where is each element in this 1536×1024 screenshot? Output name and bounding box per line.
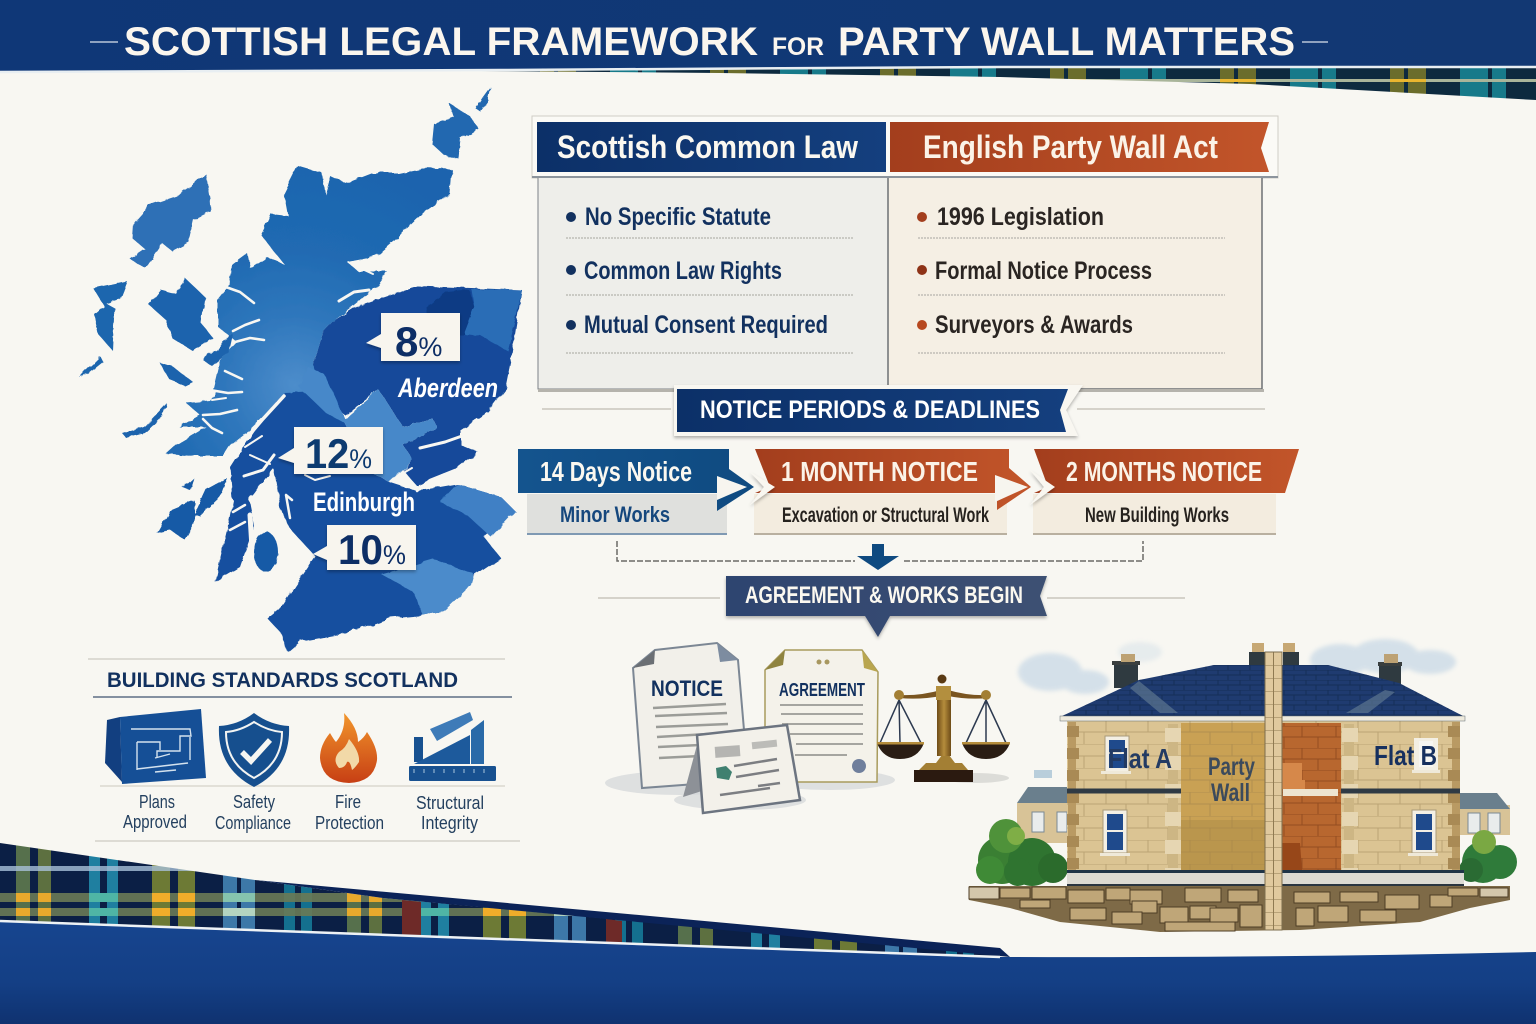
illustration: ground and stone foundation (969, 886, 1510, 932)
label: Aberdeen: Aberdeen (397, 373, 498, 403)
step: 2 months notice: 2 MONTHS NOTICE (1066, 456, 1262, 487)
label: safety compliance: Safety (233, 792, 275, 812)
header band (0, 0, 1536, 100)
icon: signed card (674, 725, 806, 813)
title: PARTY WALL MATTERS (838, 20, 1295, 64)
icon: structural tools (409, 712, 496, 781)
label: structural integrity: Integrity (421, 813, 478, 833)
header: English Party Wall Act: English Party Wall Act (923, 129, 1218, 165)
sea lochs (203, 268, 462, 548)
floor lines (1067, 788, 1460, 794)
arrow: first chevron (750, 472, 775, 505)
header: English Party Wall Act (890, 122, 1269, 172)
windows (1100, 736, 1440, 856)
step: 14 days notice: Minor Works (560, 502, 670, 527)
title: FOR (772, 33, 824, 61)
banner: agreement and works begin: AGREEMENT & WORKS BEGIN (745, 582, 1023, 609)
callout: 12% (278, 427, 383, 477)
southern central region (215, 392, 515, 652)
central wall column (1265, 652, 1282, 930)
header: Scottish Common Law: Scottish Common Law (557, 129, 858, 165)
step: 1 month notice: 1 MONTH NOTICE (781, 456, 978, 487)
icon: scales of justice (877, 674, 1010, 783)
map of Scotland (79, 87, 522, 652)
icon: agreement document: AGREEMENT (779, 680, 865, 700)
header: Scottish Common Law (537, 122, 886, 172)
icon: notice document: NOTICE (651, 676, 723, 701)
label: safety compliance (215, 792, 291, 833)
eastern grampian region (313, 286, 522, 486)
icon: agreement document (765, 650, 895, 790)
step: 14 days notice: 14 Days Notice (540, 456, 692, 487)
panel: comparison table (532, 116, 1278, 392)
callout: 10% (313, 525, 416, 573)
roof (1060, 665, 1465, 717)
banner: agreement and works begin (598, 576, 1185, 637)
illustration: neighbouring buildings (1017, 770, 1510, 843)
title (90, 20, 1328, 64)
label: Flat B: Flat B (1374, 740, 1437, 771)
arrow: down to agreement (857, 544, 899, 570)
callout: 8%: 8% (395, 318, 442, 365)
region: central light patch (298, 367, 437, 482)
step: 2 months notice: New Building Works (1085, 504, 1229, 527)
footer band with tartan (0, 843, 1536, 1024)
islands (130, 174, 211, 268)
icon: plans (105, 709, 206, 784)
eaves (1060, 716, 1465, 721)
chimneys (1112, 643, 1402, 688)
cutaway brick section (1282, 723, 1341, 870)
list: Scottish law points: No Specific Statute (585, 203, 771, 231)
connector: dashed bracket (617, 541, 1143, 561)
party wall section (1181, 723, 1265, 870)
banner: notice periods: NOTICE PERIODS & DEADLINES (700, 396, 1040, 424)
illustration: main house (1060, 643, 1465, 930)
plinth (1067, 870, 1464, 886)
region: Dumfries patch (381, 559, 474, 615)
icon: shield (219, 713, 289, 787)
step: 1 month notice (754, 449, 1031, 535)
label: Edinburgh: Edinburgh (313, 487, 415, 517)
stone walls (1067, 720, 1460, 870)
label: fire protection (315, 792, 384, 833)
label: plans approved (123, 792, 187, 832)
step: 1 month notice: Excavation or Structural Work (782, 504, 989, 527)
region: Borders patch (440, 484, 515, 537)
illustration: sky clouds (1018, 639, 1456, 694)
illustration: trees (976, 819, 1517, 886)
list: Scottish law points: Mutual Consent Required (584, 311, 828, 339)
label: structural integrity: Structural (416, 793, 484, 813)
panel: building standards (88, 659, 520, 841)
region: dark Aberdeenshire patch (427, 290, 474, 334)
callout: 8% (366, 313, 460, 365)
list: English act points: 1996 Legislation (937, 203, 1104, 231)
title: SCOTTISH LEGAL FRAMEWORK (124, 20, 758, 64)
list: English act points: Surveyors & Awards (935, 311, 1133, 339)
label: Party Wall (1208, 753, 1255, 807)
icon: notice document (605, 643, 755, 795)
label: structural integrity (416, 793, 484, 833)
callout: 12%: 12% (305, 430, 372, 477)
icon: flame (320, 713, 377, 783)
right column body (888, 177, 1262, 389)
label: plans approved: Plans (139, 792, 175, 812)
northern highlands region (166, 166, 452, 456)
arrow: second chevron (1030, 470, 1055, 505)
label: Party Wall: Party (1208, 753, 1255, 781)
callout: 10%: 10% (338, 526, 406, 573)
list: Scottish law points: Common Law Rights (584, 257, 782, 285)
label: Flat A: Flat A (1108, 743, 1172, 774)
label: plans approved: Approved (123, 812, 187, 832)
step: 2 months notice (1033, 449, 1299, 535)
label: safety compliance: Compliance (215, 813, 291, 833)
banner: notice periods (542, 385, 1265, 436)
list: English act points: Formal Notice Process (935, 257, 1152, 285)
step: 14 days notice (518, 449, 754, 535)
heading: BUILDING STANDARDS SCOTLAND (107, 669, 458, 692)
label: Party Wall: Wall (1211, 779, 1250, 807)
left column body (538, 177, 888, 389)
region: Buchan patch (464, 289, 522, 351)
list: Scottish law points (566, 203, 853, 353)
label: fire protection: Protection (315, 813, 384, 833)
label: fire protection: Fire (335, 792, 361, 812)
list: English act points (917, 203, 1225, 353)
